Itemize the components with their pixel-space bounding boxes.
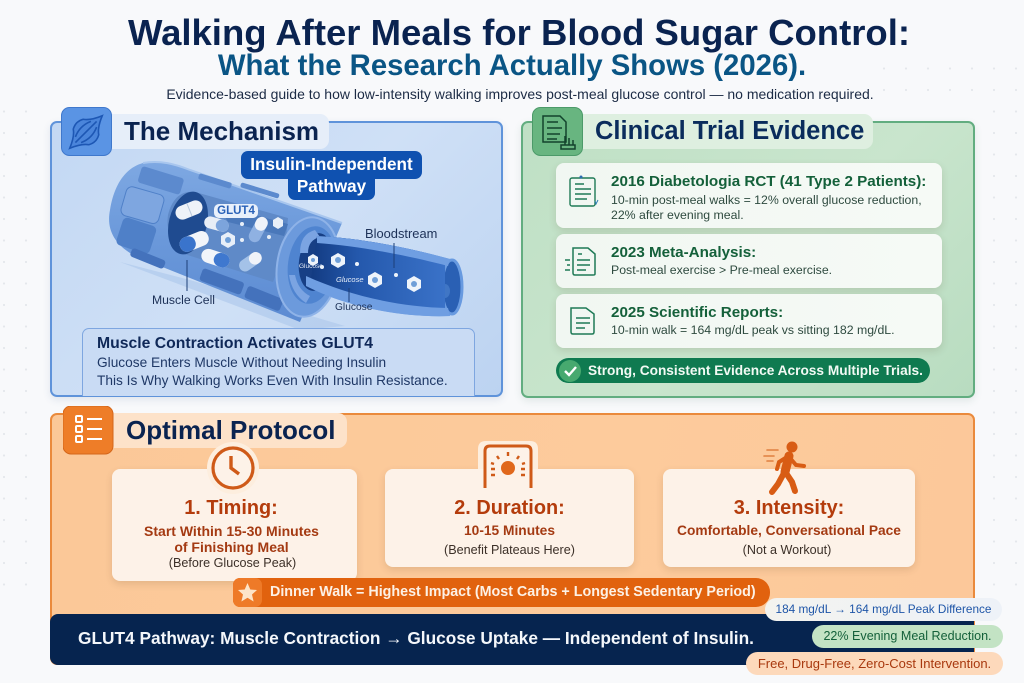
duration note: (Benefit Plateaus Here) — [444, 543, 575, 557]
icon: document — [570, 307, 595, 335]
icon: clipboard — [569, 176, 598, 207]
illustration: muscle cell and bloodstream — [109, 161, 464, 328]
heading: optimal protocol — [63, 406, 347, 454]
card: 2025 scientific reports — [556, 294, 942, 348]
icon: timer box — [478, 441, 538, 488]
duration text: 10-15 Minutes — [464, 523, 555, 538]
banner: dinner walk — [233, 578, 770, 607]
card text: 2016: 10-min post-meal walks = 12% overall glucose reduction, — [611, 193, 922, 207]
card text: 2016 — [611, 193, 922, 222]
panel: optimal protocol — [50, 413, 975, 665]
glucose particles — [308, 253, 421, 292]
card heading: 2023: 2023 Meta-Analysis: — [611, 244, 756, 261]
badge bottom line — [288, 175, 375, 200]
title line 1: Walking After Meals for Blood Sugar Control: — [128, 12, 910, 53]
banner text: Strong, Consistent Evidence Across Multiple Trials. — [588, 363, 923, 378]
star badge — [233, 578, 262, 607]
badge: insulin-independent pathway — [241, 151, 422, 200]
heading pill — [562, 114, 873, 149]
capsules — [173, 198, 270, 274]
card text: 2025: 10-min walk = 164 mg/dL peak vs sitting 182 mg/dL. — [611, 323, 895, 337]
icon: muscle — [61, 107, 112, 156]
label: GLUT4: GLUT4 — [217, 205, 255, 217]
card heading: 2025: 2025 Scientific Reports: — [611, 304, 783, 321]
icon: report — [532, 107, 583, 156]
subtitle: Evidence-based guide to how low-intensity walking improves post-meal glucose control — no medication required. — [166, 86, 874, 102]
banner: strong evidence — [556, 358, 930, 383]
callout text: Glucose Enters Muscle Without Needing Insulin — [97, 355, 386, 370]
badge top line: Insulin-Independent — [250, 155, 413, 174]
card heading: 2016: 2016 Diabetologia RCT (41 Type 2 Patients): — [611, 173, 926, 190]
timing text: of Finishing Meal — [174, 539, 289, 555]
stat pill: evening meal — [812, 625, 1003, 648]
callout text: This Is Why Walking Works Even With Insulin Resistance. — [97, 373, 448, 388]
timing note: (Before Glucose Peak) — [169, 556, 296, 570]
heading: clinical trial evidence — [532, 107, 873, 156]
callout heading: Muscle Contraction Activates GLUT4 — [97, 335, 373, 352]
callout text — [97, 355, 448, 388]
label: Muscle Cell: Muscle Cell — [152, 293, 215, 307]
badge bottom line: Pathway — [297, 177, 366, 196]
label: Bloodstream: Bloodstream — [365, 226, 437, 241]
tube overlap at ring — [310, 236, 445, 314]
heading text: Clinical Trial Evidence — [595, 117, 864, 145]
icon: walker — [763, 442, 806, 495]
stat pill: peak difference: 184 mg/dL → 164 mg/dL Peak Difference — [776, 602, 991, 616]
check icon — [559, 360, 581, 382]
heading: the mechanism — [61, 107, 329, 156]
navy bar text: GLUT4 Pathway: Muscle Contraction → Glucose Uptake — Independent of Insulin. — [78, 628, 754, 648]
banner text: Dinner Walk = Highest Impact (Most Carbs + Longest Sedentary Period) — [270, 584, 756, 600]
stat pill: free intervention: Free, Drug-Free, Zero-Cost Intervention. — [758, 656, 991, 671]
stat pill: peak difference — [765, 598, 1002, 621]
icon: clock — [207, 442, 259, 494]
card: duration — [385, 469, 634, 567]
timing text: Start Within 15-30 Minutes — [144, 523, 319, 539]
card text: 2016: 22% after evening meal. — [611, 208, 744, 222]
inner window — [167, 192, 288, 282]
muscle cylinder — [109, 162, 346, 322]
callout: muscle contraction — [82, 328, 475, 396]
navy bar: GLUT4 pathway — [50, 614, 974, 665]
card text: 2023: Post-meal exercise > Pre-meal exercise. — [611, 263, 832, 277]
badge top line — [241, 151, 422, 179]
panel: clinical trial evidence — [521, 121, 975, 398]
title line 2: What the Research Actually Shows (2026). — [218, 49, 806, 82]
timing heading: 1. Timing: — [184, 497, 278, 519]
leader lines — [187, 243, 394, 302]
shadow — [120, 262, 345, 330]
icon: checklist — [63, 406, 114, 454]
intensity note: (Not a Workout) — [743, 543, 831, 557]
card: 2016 diabetologia RCT — [556, 163, 942, 228]
stat pill: evening meal: 22% Evening Meal Reduction. — [823, 629, 992, 643]
card: intensity — [663, 469, 915, 567]
label: Glucose: Glucose — [335, 302, 372, 313]
timing text — [144, 523, 319, 555]
icon: document with lines — [565, 247, 596, 276]
duration heading: 2. Duration: — [454, 497, 565, 519]
stat pill: free intervention — [746, 652, 1003, 675]
card: timing — [112, 469, 357, 581]
intensity heading: 3. Intensity: — [734, 497, 844, 519]
panel: the mechanism — [50, 121, 503, 397]
heading text: Optimal Protocol — [126, 415, 335, 445]
bloodstream tube — [308, 236, 462, 316]
label: Glucose inside tube: Glucose — [336, 275, 364, 284]
heading pill — [91, 114, 329, 149]
card: 2023 meta-analysis — [556, 234, 942, 288]
heading pill — [93, 413, 347, 448]
title — [128, 12, 910, 102]
heading text: The Mechanism — [124, 116, 319, 146]
intensity text: Comfortable, Conversational Pace — [677, 523, 901, 538]
label: Glucose entering: Glucose — [299, 263, 323, 270]
cylinder end ring — [270, 213, 346, 321]
